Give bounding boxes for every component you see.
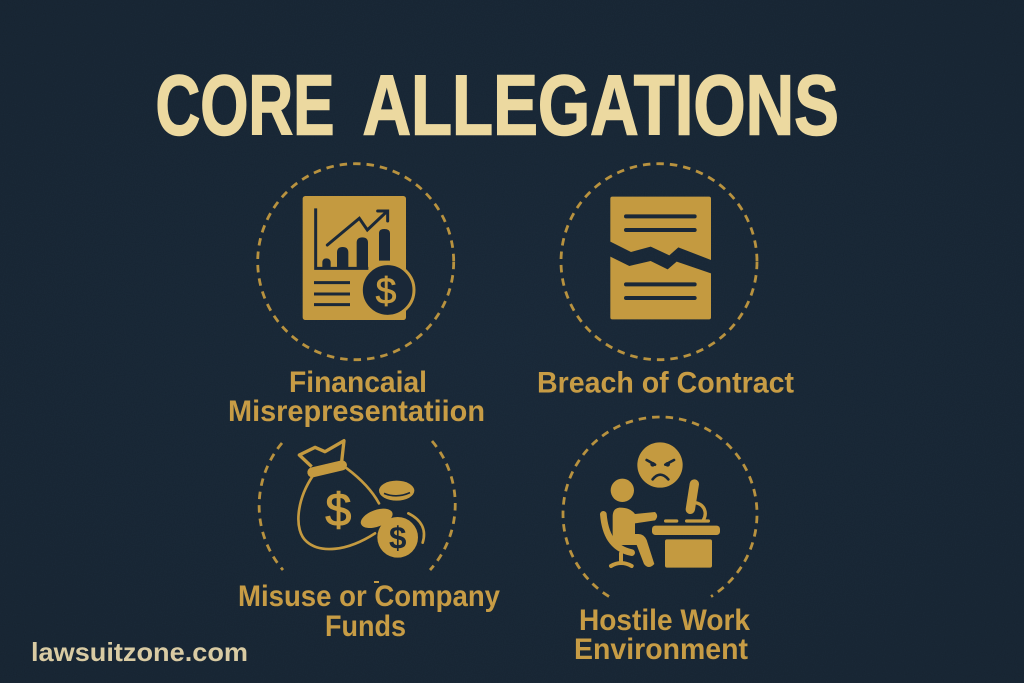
dashed arc: hostile (563, 417, 757, 596)
label: financial misrepresentation: Misrepresentatiion (228, 395, 485, 428)
label: financial misrepresentation (228, 366, 485, 428)
dashed ring: breach (561, 164, 757, 360)
panel: breach of contract (537, 164, 794, 400)
panel: financial misrepresentation (228, 164, 485, 428)
label: misuse of company funds (238, 580, 500, 643)
label: breach of contract: Breach of Contract (537, 366, 794, 400)
label: hostile work environment: Environment (574, 633, 748, 666)
icon: money bag and coins: $ (389, 521, 406, 556)
icon: financial report with dollar (303, 196, 414, 320)
label: hostile work environment (574, 604, 750, 666)
icon: financial report with dollar: $ (376, 269, 397, 311)
icon: torn contract (610, 197, 711, 319)
title: CORE (156, 58, 334, 154)
dashed ring: financial (258, 164, 454, 360)
label: misuse of company funds: Misuse or Company (238, 580, 500, 613)
watermark: lawsuitzone.com (31, 637, 248, 667)
title: ALLEGATIONS (362, 58, 839, 154)
label: hostile work environment: Hostile Work (579, 604, 750, 637)
label: financial misrepresentation: Financaial (289, 366, 427, 399)
icon: money bag and coins: $ (325, 483, 351, 535)
title (156, 58, 839, 154)
panel: misuse of company funds (238, 441, 500, 643)
icon: angry face and person at desk (603, 442, 720, 568)
icon: money bag and coins (298, 441, 424, 558)
dashed arcs: funds (259, 441, 455, 570)
label: misuse of company funds: Funds (325, 610, 406, 643)
panel: hostile work environment (563, 417, 757, 666)
